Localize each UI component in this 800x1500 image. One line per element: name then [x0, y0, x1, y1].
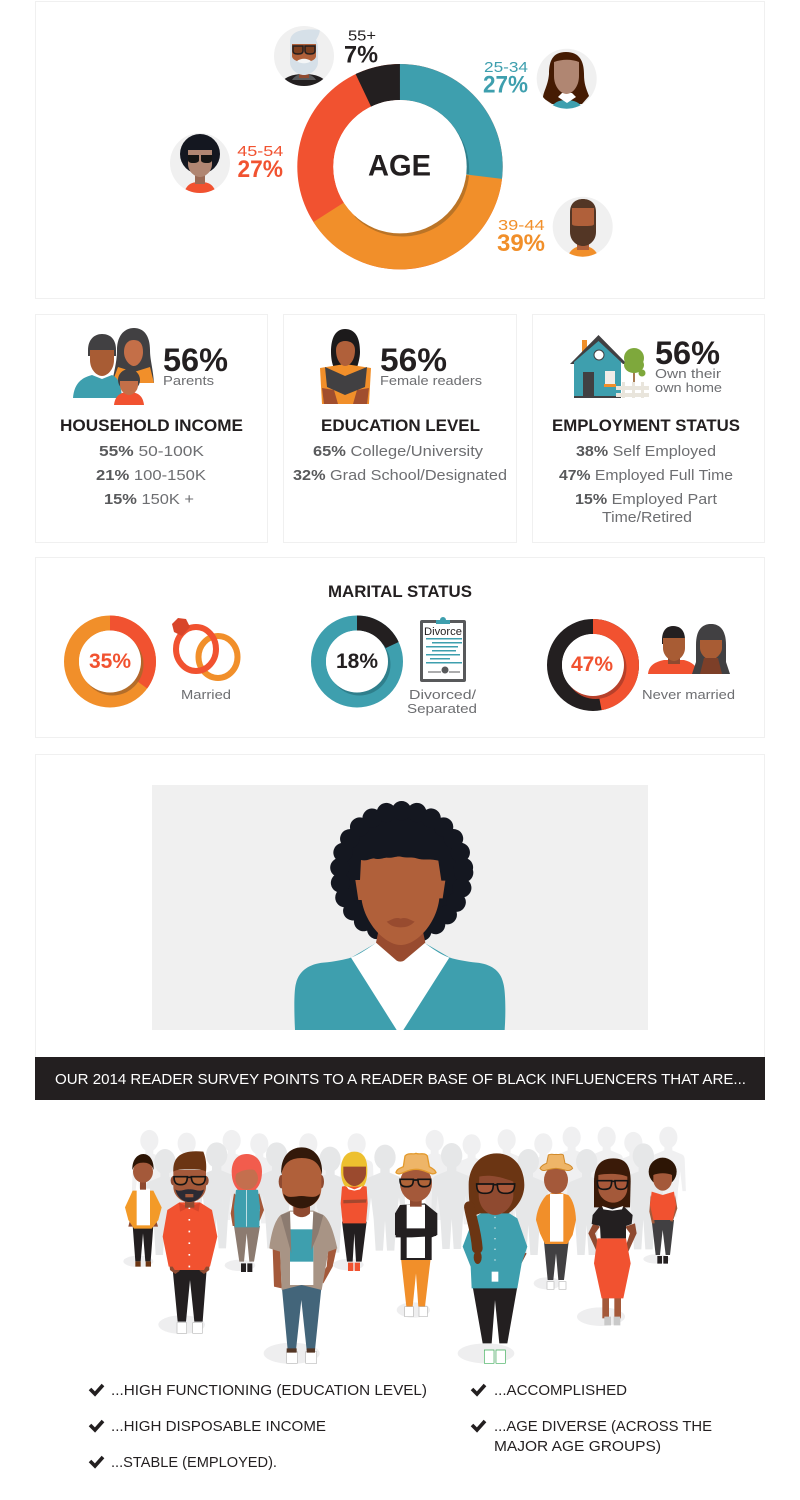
heading: education level: EDUCATION LEVEL	[321, 416, 480, 435]
background silhouettes	[132, 1127, 686, 1255]
person: woman, blond hair, arms crossed	[333, 1152, 368, 1271]
avatar: older man 55+	[274, 26, 334, 86]
person: large woman, braid, teal shirt	[458, 1153, 527, 1363]
label: 55+ 7%: 7%	[344, 41, 378, 68]
donut: married 35%: 35%	[89, 650, 131, 673]
label: 45-54 27%: 27%	[238, 156, 283, 183]
icon: divorce clipboard	[420, 617, 466, 682]
icon: wedding rings	[172, 618, 238, 678]
list: income brackets: 55% 50-100K	[99, 443, 204, 460]
icon: divorce clipboard: Divorce	[424, 626, 462, 638]
list: employment: Time/Retired	[602, 509, 692, 526]
item: high functioning: ...HIGH FUNCTIONING (EDUCATION LEVEL)	[111, 1382, 427, 1399]
label: 25-34 27%: 27%	[483, 72, 528, 99]
portrait background	[152, 785, 648, 1030]
list: income brackets	[96, 443, 206, 508]
label: divorced / separated	[407, 687, 477, 716]
icon: woman reading	[320, 329, 371, 404]
label: divorced / separated: Separated	[407, 701, 477, 716]
label: 55+ 7%: 55+	[348, 28, 376, 45]
heading: employment status: EMPLOYMENT STATUS	[552, 416, 740, 435]
person: woman, black top, red skirt	[577, 1158, 637, 1326]
item: age diverse: ...AGE DIVERSE (ACROSS THE	[494, 1418, 712, 1435]
list: income brackets: 21% 100-150K	[96, 467, 206, 484]
label: 45-54 27%	[237, 143, 283, 183]
checklist: left column	[90, 1382, 427, 1471]
panel: reader portrait	[36, 754, 764, 1058]
item: stable: ...STABLE (EMPLOYED).	[111, 1454, 277, 1471]
list: education	[293, 443, 507, 484]
list: employment: 38% Self Employed	[576, 443, 716, 460]
list: employment: 47% Employed Full Time	[559, 467, 733, 484]
illustration: crowd of readers	[123, 1127, 686, 1364]
stat: 56% own their own home: Own their	[655, 366, 722, 381]
heading: marital status: MARITAL STATUS	[328, 582, 472, 601]
avatar: afro woman 45-54	[170, 133, 230, 193]
avatar: bearded man 39-44	[553, 197, 613, 258]
label: never married: Never married	[642, 687, 735, 702]
person: small man, orange jacket	[123, 1154, 162, 1267]
donut: divorced 18%: 18%	[336, 650, 378, 673]
person: man, hat, orange jacket	[534, 1154, 576, 1289]
label: 25-34 27%: 25-34	[484, 59, 528, 76]
stat: 56% female readers: Female readers	[380, 373, 483, 388]
panel: household income	[36, 314, 268, 542]
stat: 56% parents: 56%	[163, 342, 228, 378]
list: employment	[559, 443, 733, 526]
panel: age	[36, 2, 764, 298]
icon: family	[73, 328, 154, 405]
donut: divorced 18%	[318, 623, 396, 700]
stat: 56% own their own home: own home	[655, 380, 722, 395]
person: central man, bearded, tan jacket	[264, 1147, 337, 1364]
stat: 56% own their own home: 56%	[655, 335, 720, 371]
donut: never married 47%	[554, 626, 632, 704]
label: 39-44 39%: 39-44	[498, 217, 545, 234]
person: man, hat, black jacket	[395, 1153, 437, 1318]
list: income brackets: 15% 150K +	[104, 491, 194, 508]
label: 45-54 27%: 45-54	[237, 143, 283, 160]
stat: 56% female readers	[380, 342, 483, 388]
label: 39-44 39%: 39%	[497, 230, 545, 257]
label: divorced / separated: Divorced/	[409, 687, 476, 702]
item: age diverse	[472, 1418, 712, 1455]
label: 39-44 39%	[497, 217, 545, 257]
panel: education level	[284, 314, 516, 542]
person: man, red shirt	[158, 1151, 217, 1334]
item: age diverse: MAJOR AGE GROUPS)	[494, 1438, 661, 1455]
donut label: age: AGE	[368, 150, 431, 183]
stat: 56% parents: Parents	[163, 373, 215, 388]
list: education: 65% College/University	[313, 443, 484, 460]
checklist: right column	[472, 1382, 712, 1455]
list: education: 32% Grad School/Designated	[293, 467, 507, 484]
icon: house	[570, 335, 649, 398]
panel: employment status	[532, 314, 764, 542]
stat: 56% female readers: 56%	[380, 342, 447, 378]
list: employment: 15% Employed Part	[575, 491, 718, 508]
banner: OUR 2014 READER SURVEY POINTS TO A READER BASE OF BLACK INFLUENCERS THAT ARE...	[55, 1071, 746, 1088]
age donut chart	[297, 64, 503, 270]
illustration: woman with afro	[294, 810, 505, 1030]
item: accomplished: ...ACCOMPLISHED	[494, 1382, 627, 1399]
donut: married 35%	[72, 623, 148, 700]
label: 55+ 7%	[344, 28, 378, 68]
person: woman, red hair, teal vest	[225, 1154, 264, 1272]
stat: 56% own their own home	[655, 335, 722, 395]
label: married: Married	[181, 687, 231, 702]
heading: household income: HOUSEHOLD INCOME	[60, 416, 243, 435]
banner	[35, 1057, 765, 1100]
item: high disposable income: ...HIGH DISPOSABLE INCOME	[111, 1418, 326, 1435]
label: 25-34 27%	[483, 59, 528, 99]
panel: marital status	[36, 558, 764, 738]
person: small woman, afro, red top	[643, 1158, 677, 1264]
avatar: woman 25-34	[537, 49, 597, 112]
icon: single couple	[648, 624, 730, 674]
donut: never married 47%: 47%	[571, 653, 613, 676]
